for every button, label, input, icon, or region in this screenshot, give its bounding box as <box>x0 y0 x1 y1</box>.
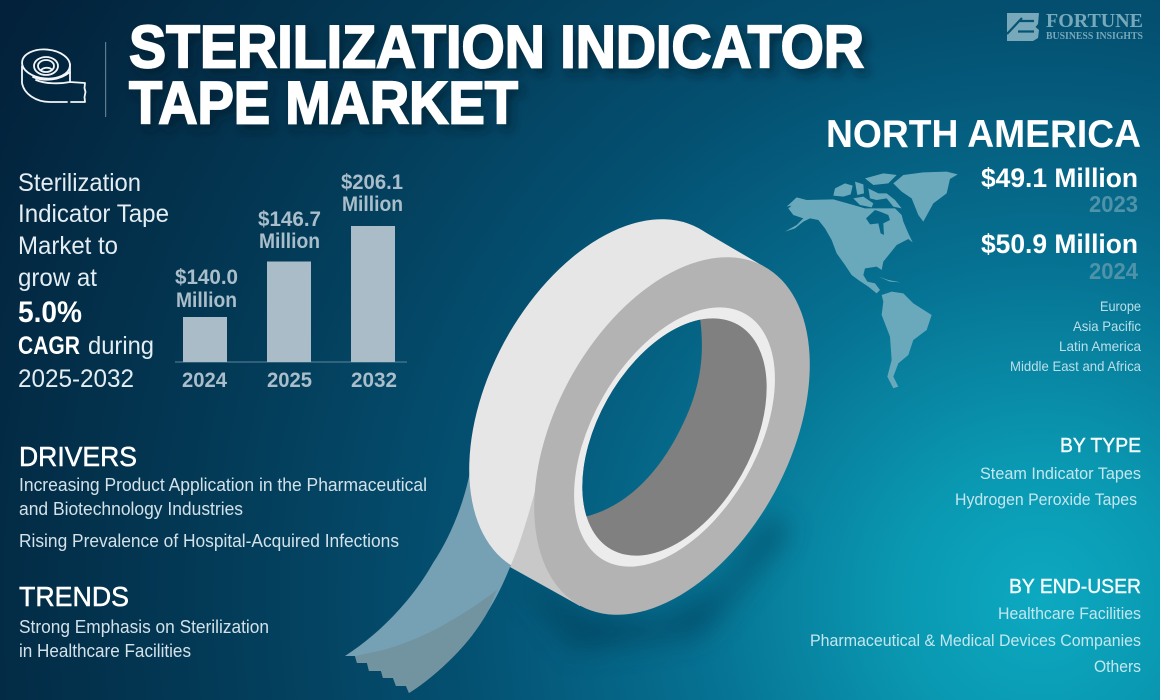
North America and Greenland <box>785 172 958 293</box>
hole <box>582 320 702 516</box>
CAGR text block: Market to <box>18 232 118 260</box>
CAGR text block: grow at <box>18 264 97 292</box>
list: other regions: Middle East and Africa <box>1010 358 1141 374</box>
panel: by type: Hydrogen Peroxide Tapes <box>955 491 1137 509</box>
North America values: 2023 <box>1089 191 1138 217</box>
CAGR text block: CAGR <box>18 332 80 360</box>
bar 2024 <box>175 266 238 392</box>
title <box>129 14 864 136</box>
panel: trends: TRENDS <box>19 581 129 612</box>
North America values: 2024 <box>1089 258 1138 284</box>
bar 2032: 2032 <box>351 369 397 392</box>
CAGR text block <box>18 169 169 393</box>
title: STERILIZATION INDICATOR <box>129 14 864 80</box>
bar 2024: $140.0 <box>175 266 238 289</box>
panel: by end-user <box>810 576 1141 676</box>
panel: by type: BY TYPE <box>1060 435 1141 457</box>
list: other regions: Asia Pacific <box>1073 318 1141 334</box>
bar 2024: 2024 <box>182 369 227 392</box>
bar 2025: Million <box>259 230 320 253</box>
bar 2024: Million <box>176 289 237 312</box>
tape ribbon <box>345 450 530 693</box>
panel: trends: Strong Emphasis on Sterilization <box>19 617 269 637</box>
panel: trends <box>19 581 269 661</box>
panel: by type <box>955 435 1141 509</box>
CAGR text block: Indicator Tape <box>18 200 169 228</box>
inner ring <box>532 273 817 601</box>
South America <box>882 292 932 388</box>
divider <box>105 42 106 117</box>
bar chart <box>175 171 407 392</box>
list: other regions <box>1010 298 1141 374</box>
map: North and South America <box>785 172 958 388</box>
CAGR text block: Sterilization <box>18 169 141 197</box>
bar 2025: 2025 <box>267 369 312 392</box>
panel: drivers: Rising Prevalence of Hospital-Acquired Infections <box>19 531 399 551</box>
North America values: $49.1 Million <box>981 163 1138 193</box>
logo: Fortune Business Insights <box>1007 10 1143 42</box>
list: other regions: Europe <box>1100 298 1141 314</box>
overlap of ribbon on side <box>510 480 580 606</box>
panel: drivers: and Biotechnology Industries <box>19 499 243 519</box>
logo: Fortune Business Insights: BUSINESS INSIGHTS <box>1046 31 1143 42</box>
panel: by type: Steam Indicator Tapes <box>980 465 1141 483</box>
North America values <box>981 163 1138 284</box>
icon: tape roll <box>21 47 86 102</box>
tape front face <box>477 211 867 661</box>
bar 2025 <box>258 208 321 392</box>
CAGR text block: during <box>88 332 154 360</box>
inner core <box>544 287 805 587</box>
list: other regions: Latin America <box>1059 338 1141 354</box>
panel: drivers: Increasing Product Application in the Pharmaceutical <box>19 475 427 495</box>
panel: by end-user: BY END-USER <box>1009 576 1141 598</box>
panel: drivers <box>19 441 427 551</box>
panel: by end-user: Pharmaceutical & Medical Devices Companies <box>810 632 1141 650</box>
CAGR text block: 2025-2032 <box>18 365 134 393</box>
title: TAPE MARKET <box>129 70 518 136</box>
bar 2025: $146.7 <box>258 208 321 231</box>
North America values: $50.9 Million <box>981 229 1138 259</box>
bar 2032: Million <box>342 193 403 216</box>
tape outer side <box>412 173 802 623</box>
bar 2032 <box>341 171 403 392</box>
panel: trends: in Healthcare Facilities <box>19 641 191 661</box>
panel: drivers: DRIVERS <box>19 441 137 472</box>
panel: North America heading: NORTH AMERICA <box>826 113 1141 156</box>
CAGR text block: 5.0% <box>18 296 82 329</box>
panel: by end-user: Others <box>1094 658 1141 676</box>
logo: Fortune Business Insights: FORTUNE <box>1046 10 1143 32</box>
illustration: tape roll <box>345 219 810 693</box>
bar 2032: $206.1 <box>341 171 403 194</box>
panel: by end-user: Healthcare Facilities <box>998 605 1141 623</box>
